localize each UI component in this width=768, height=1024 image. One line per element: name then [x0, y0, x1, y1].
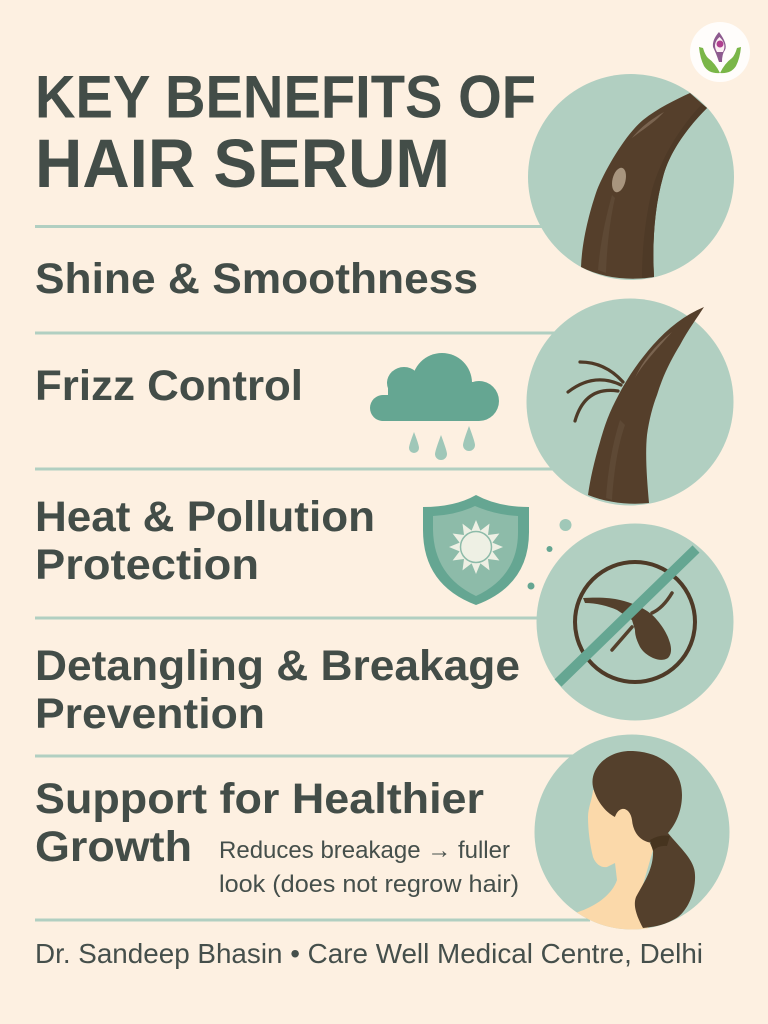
ponytail — [635, 833, 695, 928]
growth note: look (does not regrow hair) — [219, 871, 519, 898]
hair — [592, 751, 682, 843]
highlight — [610, 166, 628, 194]
benefit: support for healthier growth — [35, 775, 484, 871]
icon: shield with sun — [423, 495, 529, 605]
logo hands — [699, 47, 741, 73]
decorative dots — [528, 519, 572, 590]
ear — [615, 815, 616, 817]
growth note: Reduces breakage → fuller — [219, 837, 510, 864]
benefit: detangling and breakage prevention: Detangling & Breakage — [35, 642, 520, 690]
benefit: detangling and breakage prevention: Prevention — [35, 690, 265, 738]
benefit: heat and pollution protection: Protection — [35, 541, 259, 589]
circle icon: shiny hair strand — [528, 74, 734, 280]
benefit: frizz control: Frizz Control — [35, 362, 303, 410]
skin — [577, 790, 653, 930]
title — [35, 64, 536, 202]
hair band — [650, 836, 670, 851]
title: KEY BENEFITS OF — [35, 64, 536, 130]
title: HAIR SERUM — [35, 125, 450, 202]
prohibition slash — [558, 549, 696, 683]
broken hair — [583, 593, 672, 660]
benefit: support for healthier growth: Support for Healthier — [35, 775, 484, 823]
benefit: detangling and breakage prevention — [35, 642, 520, 738]
rain drops — [409, 426, 475, 460]
footer credit: Dr. Sandeep Bhasin • Care Well Medical Centre, Delhi — [35, 938, 703, 969]
circle icon: frizzy hair strand — [526, 298, 734, 506]
icon: cloud with rain — [370, 353, 499, 460]
growth note — [219, 837, 519, 898]
logo figure — [713, 32, 726, 62]
benefit: heat and pollution protection — [35, 493, 375, 589]
circle icon: woman with ponytail — [534, 734, 730, 935]
benefit: heat and pollution protection: Heat & Pollution — [35, 493, 375, 541]
benefit: support for healthier growth: Growth — [35, 823, 192, 871]
sun — [449, 520, 503, 574]
flyaway strands — [568, 362, 623, 421]
logo badge — [690, 22, 750, 82]
benefit: shine and smoothness: Shine & Smoothness — [35, 255, 478, 303]
circle icon: no breakage — [536, 524, 734, 720]
